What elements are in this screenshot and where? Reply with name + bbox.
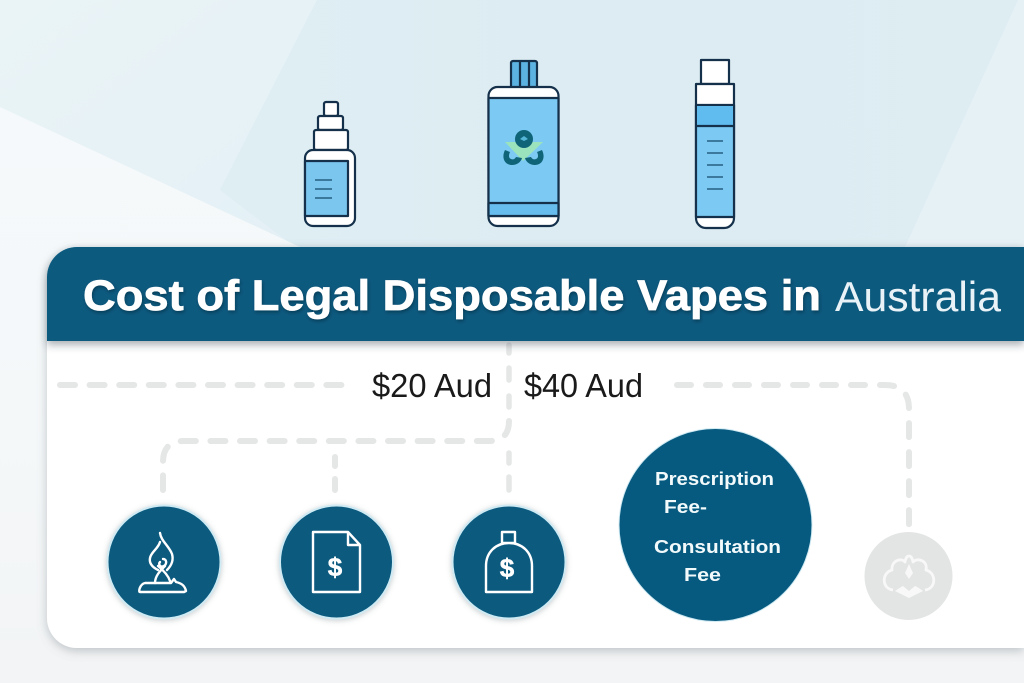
title: light word: Australia [835, 273, 1002, 320]
icon: dropper bottle [305, 102, 355, 226]
callout: prescription and consultation fee: Consultation [654, 536, 781, 557]
icon: invoice document circle [280, 506, 393, 618]
icon: money bag circle [452, 506, 566, 618]
price label: low: $20 Aud [372, 367, 492, 404]
price label: high: $40 Aud [524, 367, 643, 404]
callout: prescription and consultation fee [619, 428, 812, 622]
callout: prescription and consultation fee: Prescription [655, 468, 774, 489]
callout: prescription and consultation fee: Fee- [664, 496, 707, 517]
title: Cost of Legal Disposable Vapes in [83, 272, 821, 320]
panel: white content card [47, 247, 1024, 648]
icon: money bag circle: $ [500, 553, 515, 583]
header band [47, 247, 1024, 341]
icon: tall slim vape [696, 60, 734, 228]
icon: invoice document circle: $ [328, 552, 343, 582]
icon: large bottle with recycling emblem [488, 61, 558, 226]
icon: flame burner circle [108, 506, 220, 618]
icon: faded plant circle [864, 532, 952, 620]
callout: prescription and consultation fee: Fee [684, 564, 721, 585]
icon: recycling emblem [503, 130, 544, 165]
connector lines [60, 345, 909, 526]
